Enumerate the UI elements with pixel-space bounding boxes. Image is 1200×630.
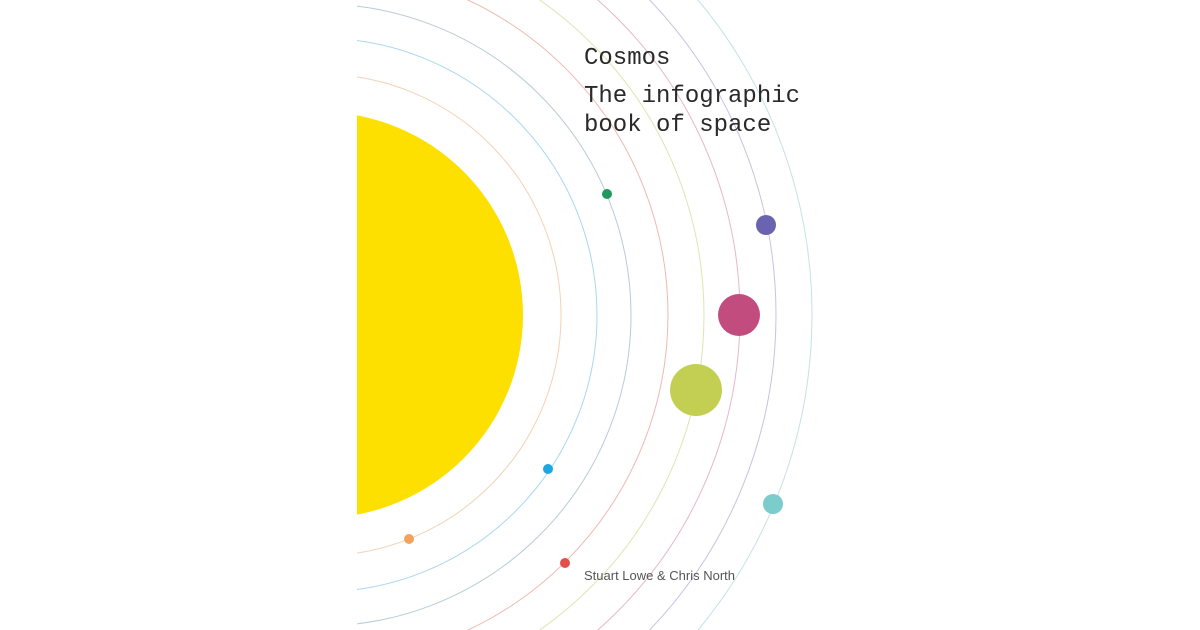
title: The infographic [584,83,800,110]
planet: earth [602,189,612,199]
sun [357,115,523,515]
orbits [357,0,812,630]
planet: uranus [756,215,776,235]
planet: neptune [763,494,783,514]
planet: jupiter [670,364,722,416]
title [584,45,800,139]
planet: mercury [404,534,414,544]
title: book of space [584,112,771,139]
planet: saturn [718,294,760,336]
title: Cosmos [584,45,670,72]
authors: Stuart Lowe & Chris North [584,568,735,583]
planet: mars [560,558,570,568]
book cover illustration [357,0,812,630]
planet: venus [543,464,553,474]
